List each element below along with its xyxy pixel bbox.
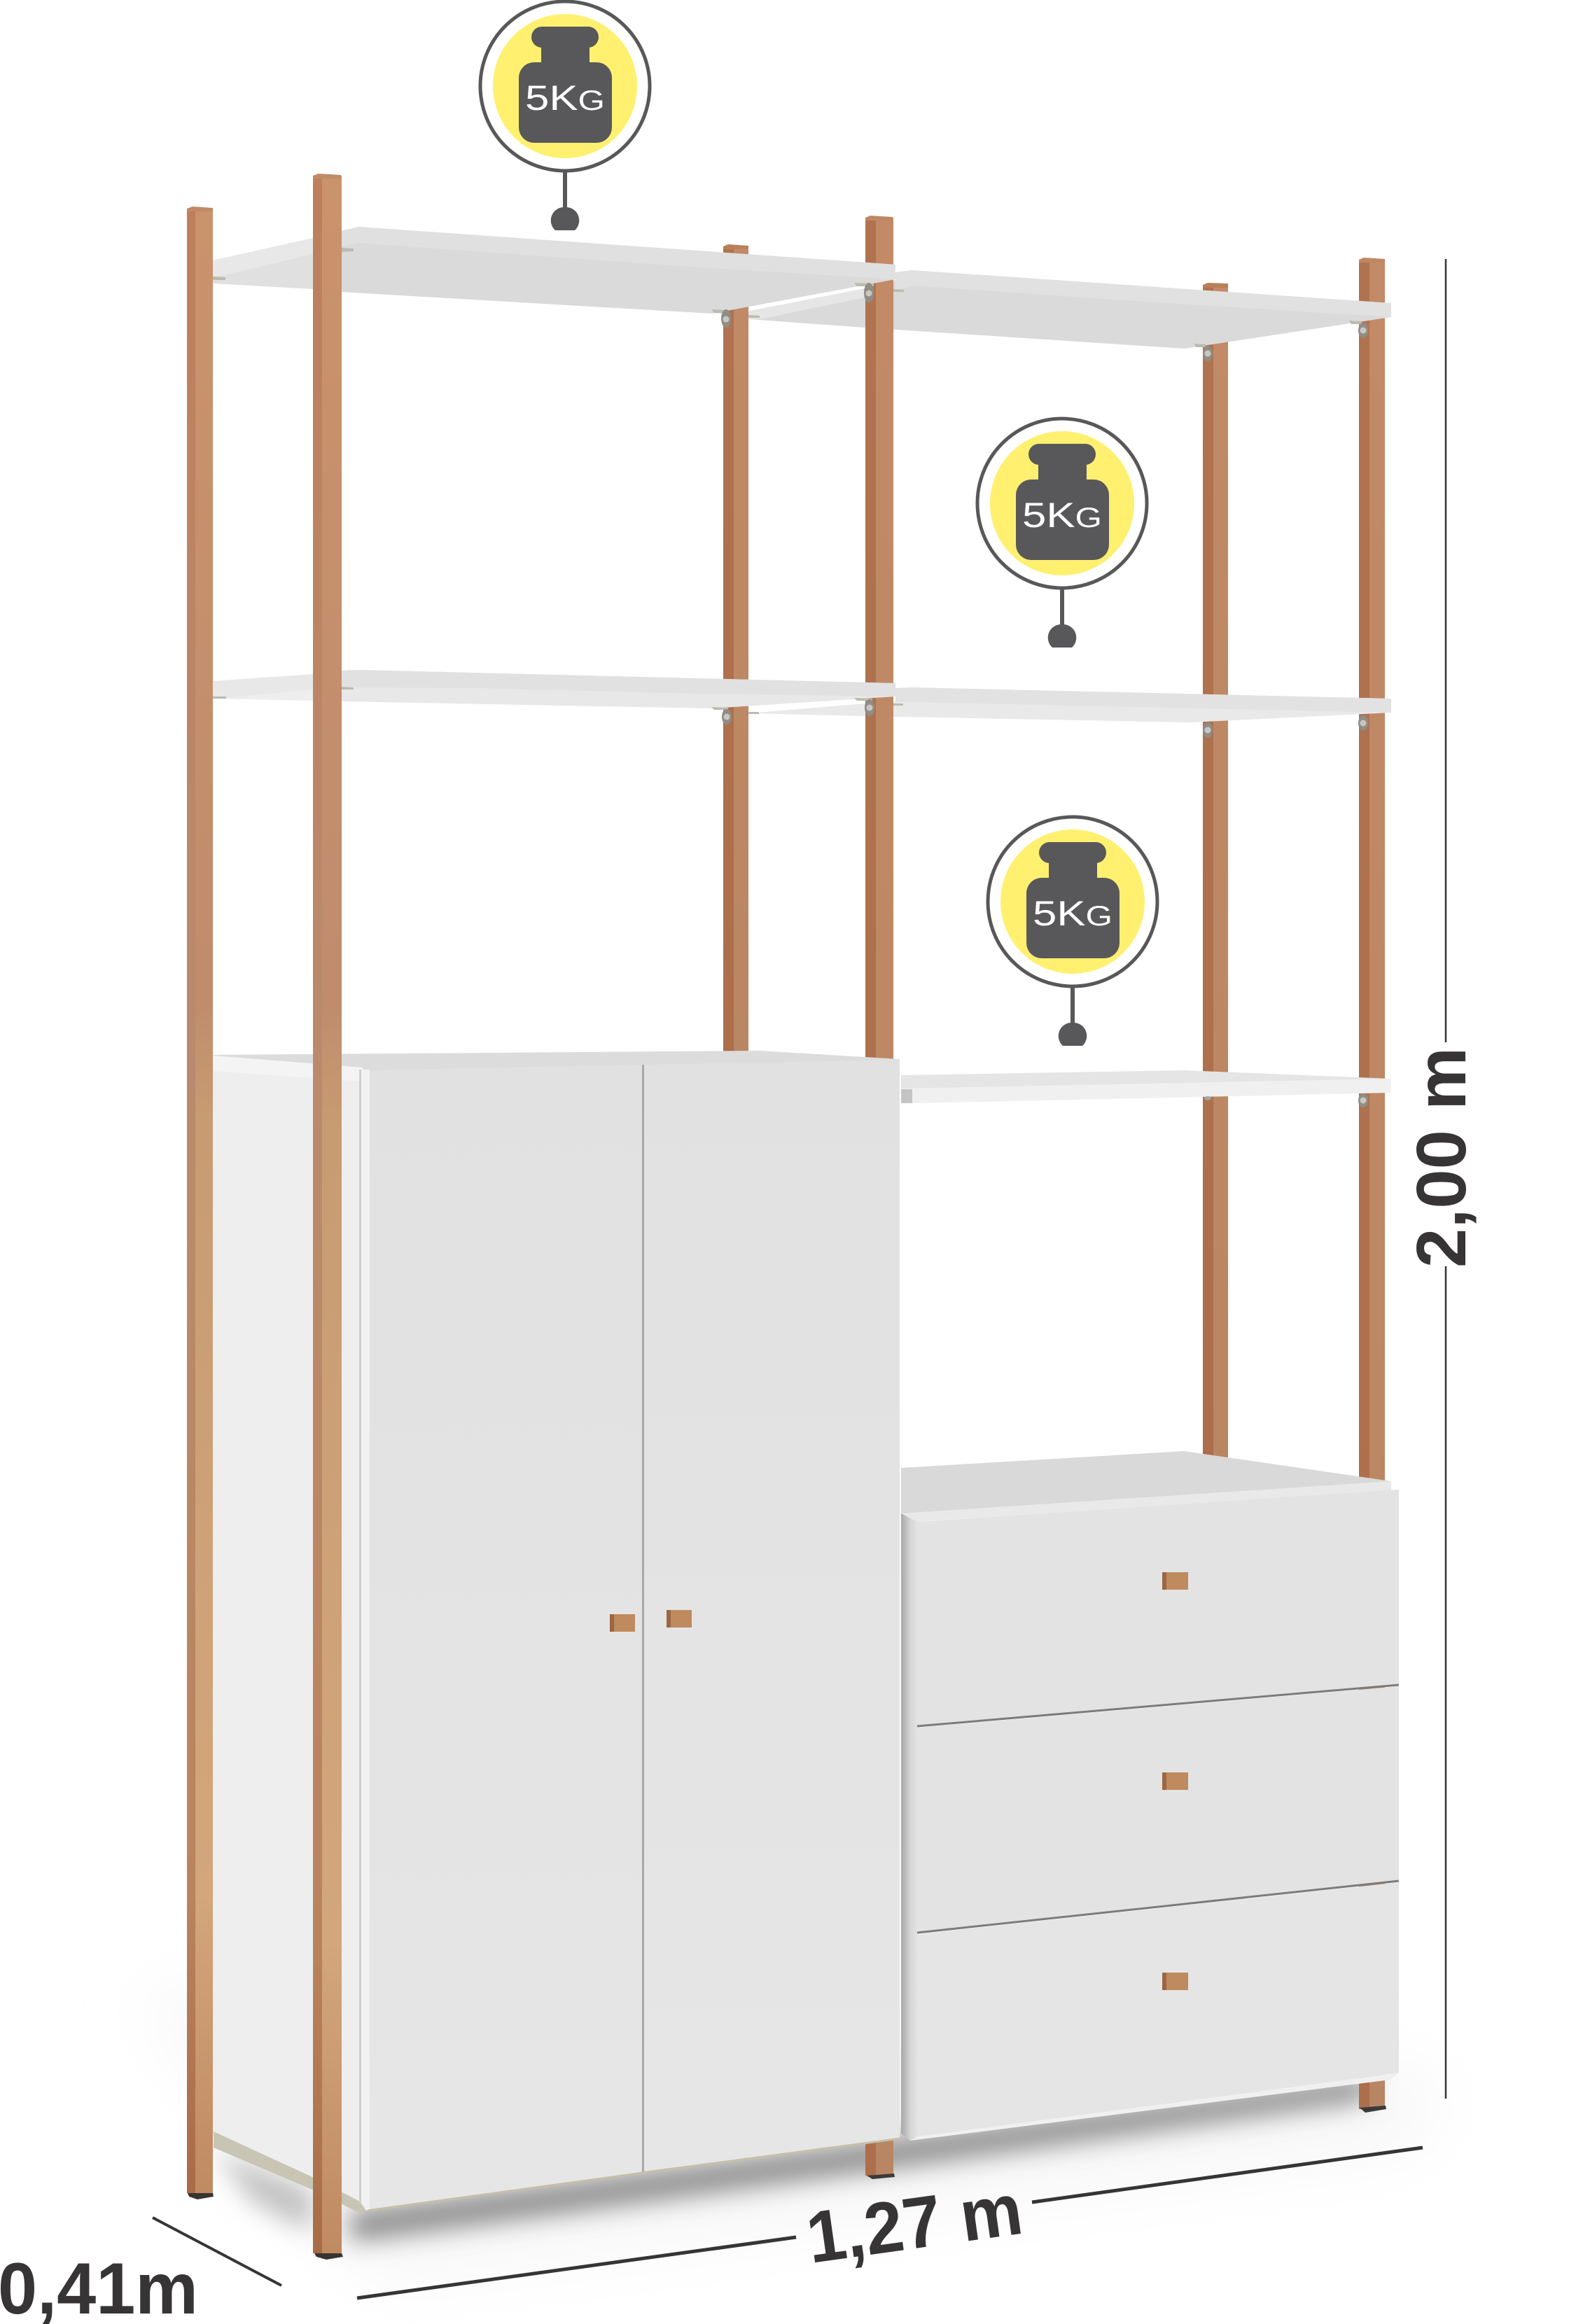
icon yellow disc	[493, 14, 637, 158]
top shelf left	[213, 227, 895, 314]
drawer front middle	[917, 1686, 1399, 1932]
width dimension	[357, 2148, 1423, 2298]
icon weight	[1026, 842, 1120, 958]
icon pointer	[1059, 986, 1087, 1046]
shelf brackets	[213, 248, 1368, 1107]
top shelf right	[747, 270, 1391, 349]
drawer front bottom	[917, 1882, 1399, 2136]
wardrobe base edge	[368, 2138, 900, 2211]
weight icon: lower shelf	[988, 817, 1157, 1046]
door knob right	[667, 1610, 692, 1628]
icon pointer	[1048, 588, 1076, 648]
front post B	[313, 174, 343, 2260]
floor shadow	[140, 1995, 1442, 2275]
left door	[370, 1065, 642, 2209]
icon label: 5K G	[525, 78, 605, 118]
dresser	[901, 1451, 1399, 2141]
icon yellow disc	[990, 431, 1134, 575]
drawer front top	[917, 1490, 1399, 1726]
back post E	[1203, 283, 1228, 1475]
height label: 2,00 m	[1402, 1047, 1481, 1268]
icon weight	[519, 27, 612, 143]
drawer divider lines	[917, 1685, 1399, 1933]
drawer knob middle	[1162, 1772, 1188, 1790]
back post D	[865, 216, 895, 2179]
icon weight	[1016, 444, 1109, 560]
door knob left	[610, 1614, 635, 1632]
icon pointer	[551, 171, 579, 230]
third shelf right	[901, 1070, 1391, 1103]
weight icon: middle shelf	[977, 419, 1147, 648]
top shelf tabs	[213, 248, 1362, 714]
wardrobe side panel	[213, 1056, 363, 2209]
icon ring	[988, 817, 1157, 986]
back post C	[723, 244, 748, 1058]
wardrobe plinth	[214, 2132, 368, 2213]
drawer knob bottom	[1162, 1973, 1188, 1990]
weight icon: top shelf	[480, 1, 650, 230]
drawer knob top	[1162, 1572, 1188, 1590]
middle shelf right	[749, 687, 1391, 722]
dresser base lip	[910, 2073, 1399, 2141]
dresser top surface	[901, 1451, 1391, 1522]
icon ring	[480, 1, 650, 171]
bracket eyes	[721, 283, 1368, 1107]
icon label: 5K G	[1033, 894, 1113, 933]
left door edge	[360, 1070, 370, 2211]
back post F	[1359, 258, 1386, 2113]
icon yellow disc	[1000, 830, 1145, 974]
dresser left side	[901, 1513, 917, 2141]
icon ring	[977, 419, 1147, 588]
front post A	[187, 206, 214, 2199]
width label: 1,27 m	[802, 2169, 1027, 2279]
wardrobe top surface	[213, 1051, 900, 1072]
icon label: 5K G	[1022, 496, 1102, 535]
right door	[644, 1060, 900, 2171]
depth dimension	[0, 2218, 281, 2324]
door gap	[642, 1065, 644, 2172]
wardrobe	[213, 1051, 900, 2213]
middle shelf left	[213, 670, 895, 708]
